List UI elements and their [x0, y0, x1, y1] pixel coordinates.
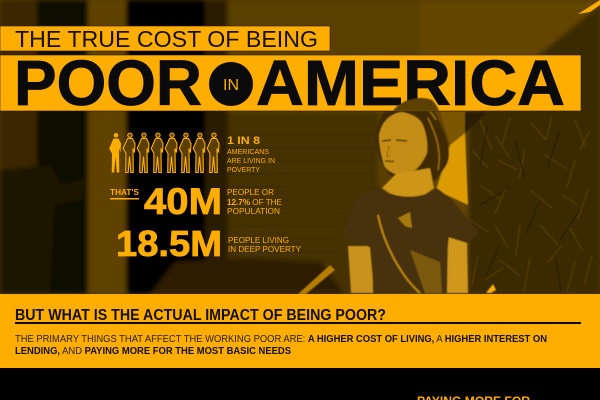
body text: THE PRIMARY THINGS THAT AFFECT THE WORKING POOR ARE: A HIGHER COST OF LIVING, A HIGHER INTEREST ON	[15, 334, 547, 345]
stat: 40M: 40M	[144, 181, 222, 222]
face	[379, 112, 427, 176]
stat: 18.5M: IN DEEP POVERTY	[228, 245, 302, 254]
stat: 40M: PEOPLE OR	[227, 188, 274, 197]
stat: 18.5M: 18.5M	[116, 223, 222, 264]
neck	[382, 168, 434, 198]
lower detail	[486, 284, 496, 293]
stat: 18.5M	[116, 223, 302, 264]
stat: 18.5M: PEOPLE LIVING	[228, 236, 289, 245]
stat: 1 in 8	[227, 135, 275, 174]
word: poor: POOR	[14, 47, 202, 119]
bush texture	[470, 116, 592, 292]
child hair overlapping band	[393, 98, 439, 111]
arms	[348, 246, 374, 293]
photo: child	[342, 99, 496, 293]
siding lines	[228, 135, 375, 252]
heading: BUT WHAT IS THE ACTUAL IMPACT OF BEING POOR?	[15, 307, 386, 324]
icon: row of eight people	[109, 133, 219, 172]
panel: black lower section	[0, 368, 600, 400]
badge: in: IN	[223, 77, 239, 94]
body text: LENDING, AND PAYING MORE FOR THE MOST BASIC NEEDS	[15, 346, 291, 357]
title band: poor in america	[0, 47, 581, 119]
badge: in	[209, 62, 253, 106]
panel: duotone photo background	[0, 0, 600, 294]
eyes and mouth	[382, 140, 407, 141]
word: america: AMERICA	[256, 47, 565, 119]
stat: 1 in 8: POVERTY	[227, 165, 260, 174]
body text	[15, 334, 547, 357]
stats block	[109, 133, 302, 264]
sunlit post behind child	[436, 133, 468, 205]
stat: 1 in 8: AMERICANS	[227, 147, 269, 156]
stat: 40M: 12.7% OF THE	[227, 198, 282, 207]
stat: 1 in 8: ARE LIVING IN	[227, 156, 275, 165]
label: that's: THAT'S	[110, 188, 140, 197]
hair	[375, 99, 449, 182]
stat: 1 in 8: 1 IN 8	[227, 135, 260, 147]
shirt	[342, 187, 479, 293]
stat: 40M: POPULATION	[227, 207, 280, 216]
panel: impact question	[0, 294, 600, 368]
stat: 40M	[144, 181, 282, 222]
title band: the true cost of being: THE TRUE COST OF BEING	[15, 26, 318, 52]
